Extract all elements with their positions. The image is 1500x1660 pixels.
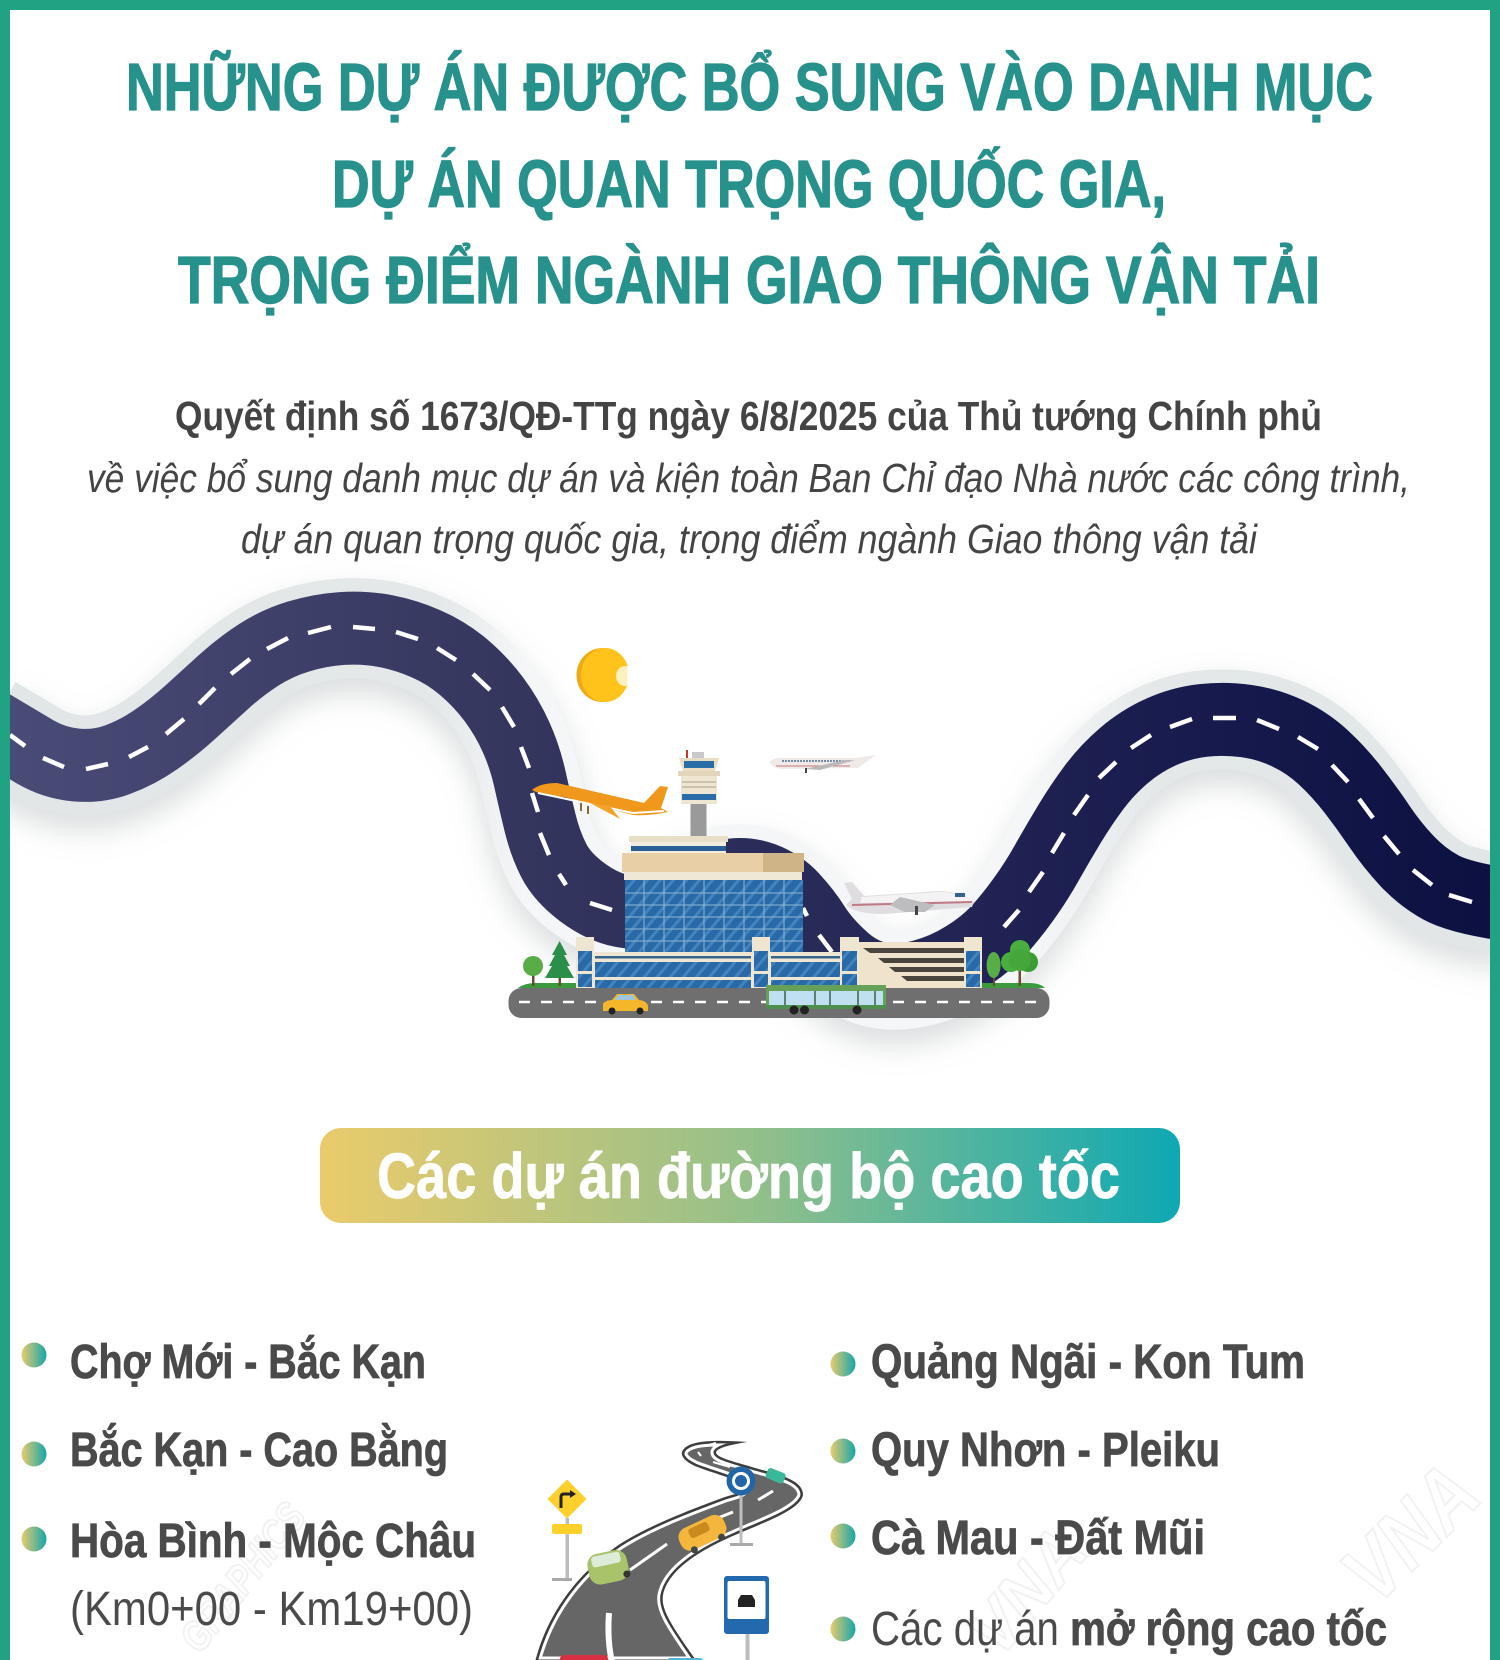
silver airplane xyxy=(844,882,974,915)
bullet item 3 xyxy=(22,1515,476,1636)
icon: parking sign xyxy=(724,1576,769,1660)
grass xyxy=(518,983,1045,988)
subtitle: Quyết định số 1673/QĐ-TTg ngày 6/8/2025 của Thủ tướng Chính phủ xyxy=(175,393,1322,439)
watermark: GRAPHICS xyxy=(170,1494,315,1660)
watermark xyxy=(170,1446,1498,1660)
orange airplane xyxy=(532,783,668,819)
icon: roundabout sign xyxy=(726,1466,756,1546)
icon: yellow sign xyxy=(548,1480,586,1581)
terminal tower block xyxy=(622,836,804,952)
yellow car xyxy=(675,1512,731,1557)
bullet item 1: Chợ Mới - Bắc Kạn xyxy=(70,1334,426,1389)
trees xyxy=(523,940,1038,986)
terminal pillars xyxy=(576,937,982,990)
heading pill xyxy=(320,1128,1180,1223)
winding road xyxy=(0,627,1500,994)
parking garage xyxy=(859,942,964,990)
small airplane xyxy=(770,755,876,773)
bullet item 7: Các dự án mở rộng cao tốc xyxy=(871,1603,1387,1656)
bullet item 2: Bắc Kạn - Cao Bằng xyxy=(70,1422,448,1477)
lower terminal xyxy=(594,952,842,990)
highway illustration xyxy=(535,1441,803,1660)
bullet item 3: Hòa Bình - Mộc Châu xyxy=(70,1515,476,1568)
bullet item 3: (Km0+00 - Km19+00) xyxy=(70,1583,473,1636)
taxi xyxy=(603,994,648,1014)
airport scene xyxy=(508,750,1050,1018)
control tower xyxy=(678,750,720,839)
list: right column xyxy=(830,1336,1387,1656)
bullet item 4: Quảng Ngãi - Kon Tum xyxy=(871,1336,1305,1389)
heading pill: Các dự án đường bộ cao tốc xyxy=(377,1140,1120,1212)
green car xyxy=(585,1548,631,1587)
subtitle: dự án quan trọng quốc gia, trọng điểm ngành Giao thông vận tải xyxy=(241,516,1259,562)
street xyxy=(508,988,1050,1018)
subtitle xyxy=(87,393,1410,562)
highway xyxy=(535,1441,803,1660)
list: left column xyxy=(22,1334,476,1636)
red car xyxy=(560,1655,608,1660)
bus xyxy=(766,985,886,1014)
title: DỰ ÁN QUAN TRỌNG QUỐC GIA, xyxy=(332,146,1166,222)
teal car xyxy=(765,1467,787,1484)
bullet item 6: Cà Mau - Đất Mũi xyxy=(871,1512,1205,1565)
title xyxy=(126,50,1373,318)
bullet item 5: Quy Nhơn - Pleiku xyxy=(871,1424,1220,1477)
icon: sun xyxy=(576,648,628,702)
blue car xyxy=(667,1658,703,1660)
